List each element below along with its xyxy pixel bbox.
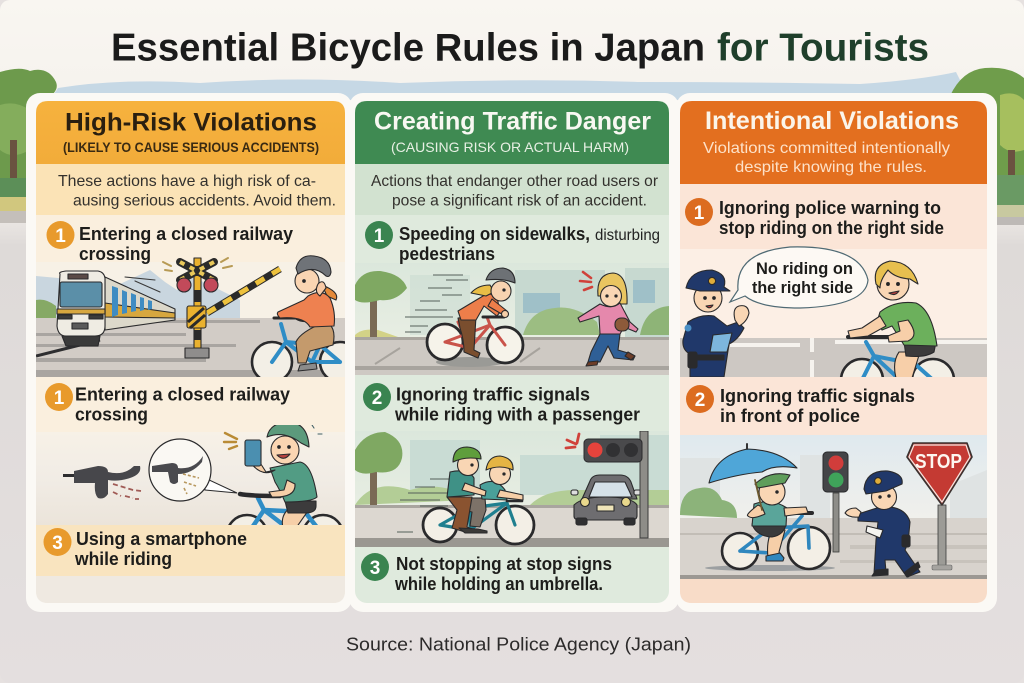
illustration: police warning a rider [680,246,987,377]
background scenery: distant hills [50,72,970,100]
rule 1 text [399,224,660,264]
badge 1: 1 [55,226,66,247]
description: ausing serious accidents. Avoid them. [73,192,336,210]
description [371,173,659,210]
speech bubble [730,247,868,308]
badge 1: 1 [694,203,705,224]
rule 3 text: Not stopping at stop signs [396,554,612,574]
source note: Source: National Police Agency (Japan) [346,634,691,654]
rule 1 text: Entering a closed railway [79,224,293,244]
rule 2 text: in front of police [720,406,860,426]
rider under umbrella [709,444,830,569]
rider with smartphone [222,425,342,525]
magnified brake callout [149,439,237,501]
illustration: two riders at a red light [355,431,669,547]
badge 2 [45,383,73,411]
rule 2 text: Ignoring traffic signals [396,384,590,404]
rule 1 text: Ignoring police warning to [719,198,941,218]
boy on bicycle [840,260,956,377]
speech bubble: the right side [752,278,853,297]
badge 2: 1 [54,388,65,409]
badge 3 [361,553,389,581]
traffic light [566,431,648,538]
description: Violations committed intentionally [703,140,950,157]
panel: Intentional Violations [680,101,987,603]
card backing [26,93,997,612]
rule 1 text: pedestrians [399,244,495,264]
background tree: left [0,69,57,223]
train [57,271,175,346]
rule 1 text: Speeding on sidewalks, [399,224,590,244]
description band [355,164,669,215]
heading: Intentional Violations [705,107,959,135]
stop sign: STOP [915,451,962,473]
rule 1 text [79,224,293,264]
stop sign [907,443,972,570]
title: Essential Bicycle Rules in Japan [111,26,705,70]
illustration: broken brake lever and phone [36,425,345,525]
badge 1: 1 [374,226,385,247]
sub-heading: (CAUSING RISK OR ACTUAL HARM) [391,139,629,155]
rule 3 text: while riding [74,549,172,569]
badge 3 [44,528,72,556]
rule 3 text: Using a smartphone [76,529,247,549]
rule 3 text: while holding an umbrella. [394,574,603,594]
description: pose a significant risk of an accident. [392,192,647,210]
rule 2 text: Entering a closed railway [75,384,290,404]
brake lever [63,466,141,499]
badge 2: 2 [372,388,382,409]
rule 2 text: Ignoring traffic signals [720,386,915,406]
rule 2 text [394,384,640,424]
rule 1 text [719,198,944,238]
rule 2 text: while riding with a passenger [394,404,640,424]
rule 3 band [36,525,345,576]
badge 2 [686,385,714,413]
illustration: train at closed railway crossing [36,256,360,382]
description: These actions have a high risk of ca- [58,173,316,190]
car [571,475,641,525]
heading band [36,101,345,164]
sub-heading: (LIKELY TO CAUSE SERIOUS ACCIDENTS) [63,139,319,155]
description: despite knowing the rules. [735,159,927,176]
rule 1 text: disturbing [595,227,660,244]
lower blank band [36,576,345,603]
badge 1 [46,221,74,249]
lower blank band [680,579,987,603]
speeding cyclist [427,268,523,367]
rule 2 text: crossing [75,404,148,424]
badge 2 [363,383,391,411]
rule 3 text [394,554,612,594]
rule 2 text [720,386,915,426]
heading band [680,101,987,184]
rule 3 text [74,529,247,569]
heading: High-Risk Violations [65,108,317,136]
police officer [683,270,749,377]
description [58,173,336,210]
heading band [355,101,669,164]
crossing signal and barrier [163,258,280,358]
description band [36,164,345,215]
heading: Creating Traffic Danger [374,108,651,136]
description: Actions that endanger other road users or [371,173,659,190]
illustration: rider with umbrella ignoring signal [680,435,987,579]
description [703,140,950,176]
cyclist [250,255,345,377]
badge 2: 2 [695,390,705,411]
riders on one bicycle [423,447,534,544]
panel: Creating Traffic Danger [355,101,669,603]
background tree: right [950,68,1024,225]
badge 3: 3 [52,533,63,554]
panel: High-Risk Violations [36,101,360,603]
rule 1 text: stop riding on the right side [719,218,944,238]
badge 3: 3 [370,558,380,579]
police officer [845,471,920,577]
speech bubble: No riding on [756,259,853,278]
illustration: speeding on sidewalk [355,263,669,375]
surprised pedestrian [578,272,638,366]
rule 1 text: crossing [79,244,151,264]
signal [823,452,848,552]
speed lines [405,275,468,332]
title: for Tourists [717,26,929,70]
rule 2 text [75,384,290,424]
badge 1 [685,198,713,226]
badge 1 [365,221,393,249]
